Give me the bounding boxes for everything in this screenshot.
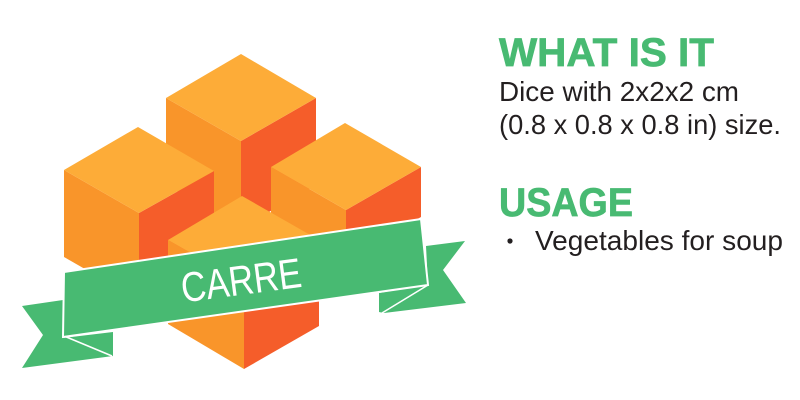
text block: description [499,76,781,140]
icon: front cube [168,196,319,369]
ribbon band [63,219,428,337]
ribbon left tail [22,300,113,368]
icon: top cube [166,54,316,228]
text block: description: (0.8 x 0.8 x 0.8 in) size. [499,109,781,140]
ribbon label: CARRE [178,249,304,311]
icon: left cube [64,127,214,300]
heading: what is it: WHAT IS IT [499,31,714,75]
usage bullet list: Vegetables for soup [535,225,783,256]
icon: right cube [271,123,421,260]
ribbon right tail [379,241,466,313]
ribbon fold lines [64,285,428,356]
illustration: stacked cubes with ribbon [22,54,466,369]
text block: description: Dice with 2x2x2 cm [499,76,739,107]
heading: usage: USAGE [499,181,633,225]
